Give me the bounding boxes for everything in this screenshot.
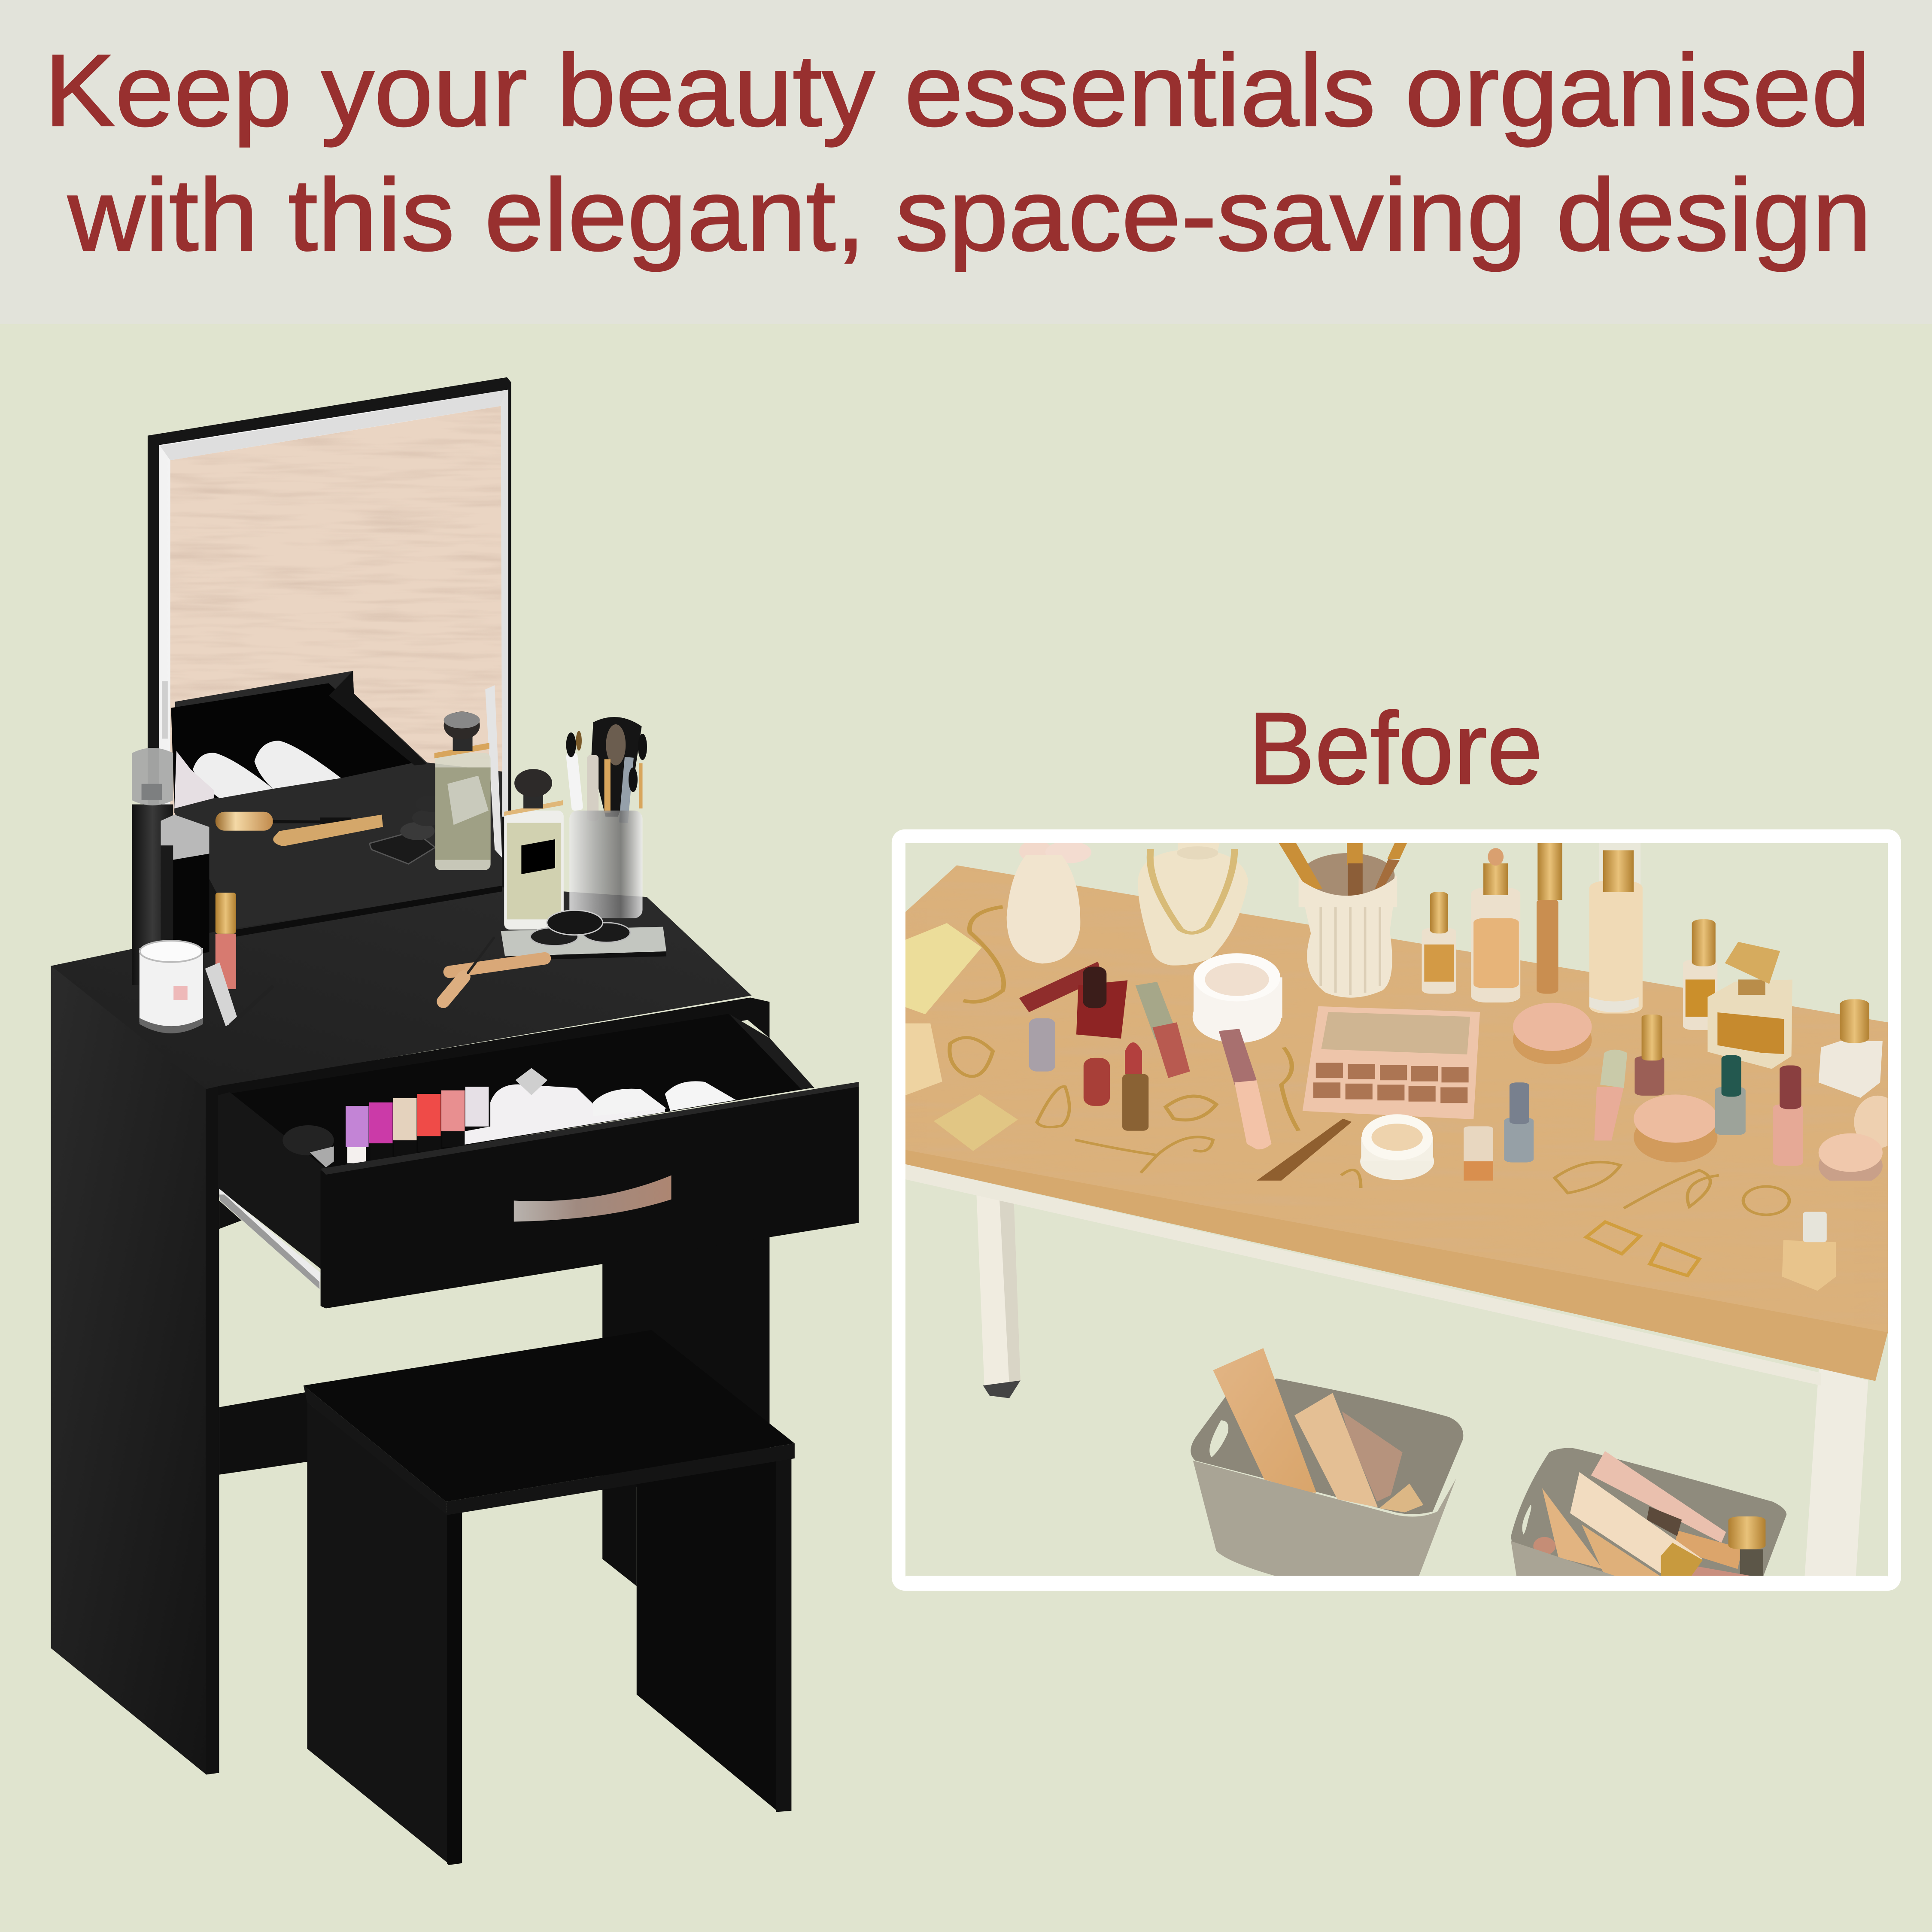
gold eyelash curler bbox=[444, 938, 545, 1002]
clear bottle bbox=[1819, 999, 1883, 1098]
mascara on mirror reflection bbox=[216, 812, 383, 846]
mirror bbox=[148, 377, 511, 981]
black box bottle bbox=[161, 814, 209, 956]
cream jar bbox=[1193, 953, 1282, 1043]
lip gloss bbox=[1594, 1050, 1627, 1141]
pink gloss bbox=[1773, 1066, 1803, 1166]
wooden brush bbox=[1537, 843, 1562, 994]
tall serum bottle bbox=[1471, 848, 1520, 1002]
drawer front bbox=[321, 1084, 859, 1309]
drawer runner bbox=[219, 1188, 321, 1289]
photo frame bbox=[892, 829, 1901, 1591]
lip gloss bbox=[216, 893, 236, 989]
compact lower bbox=[1634, 1094, 1717, 1163]
desk frame and legs bbox=[905, 1164, 1868, 1580]
drawer items bbox=[283, 1068, 736, 1167]
right lower items bbox=[1555, 1162, 1836, 1291]
table base bbox=[51, 966, 859, 1865]
title: Keep your beauty essentials organised bbox=[44, 33, 1871, 148]
large perfume bbox=[1707, 942, 1792, 1069]
brush cup bbox=[1279, 843, 1407, 998]
left items bbox=[905, 907, 1361, 1188]
perfume bottle bbox=[504, 769, 564, 930]
vase with flowers bbox=[1007, 840, 1091, 963]
stool seat bbox=[304, 1330, 795, 1502]
pink jars bbox=[1819, 1096, 1902, 1185]
photo contents: desk and left items bbox=[905, 840, 1888, 1580]
small bottle bbox=[1464, 1126, 1493, 1183]
photo frame bottom edge bbox=[905, 1576, 1888, 1591]
compacts reflected bbox=[369, 796, 447, 864]
brown polish bbox=[1634, 1015, 1664, 1096]
drawer interior bbox=[227, 1014, 812, 1169]
small amber bottle bbox=[1422, 892, 1456, 994]
stool left panel bbox=[307, 1402, 449, 1864]
compact tray bbox=[501, 910, 666, 960]
stool right panel bbox=[637, 1454, 777, 1811]
back right leg bbox=[602, 1209, 769, 1586]
teal polish bbox=[1715, 1055, 1746, 1135]
vanity table with mirror and stool bbox=[51, 377, 859, 1865]
grey polish bbox=[1504, 1082, 1534, 1163]
mirror ledge bbox=[236, 886, 502, 937]
compact upper bbox=[1513, 1003, 1592, 1064]
small jar bbox=[1360, 1114, 1434, 1180]
items on table and by mirror bbox=[132, 711, 666, 1033]
heading: before: Before bbox=[1248, 691, 1543, 805]
eyeshadow palette bbox=[1303, 1006, 1480, 1119]
amber bottle right bbox=[1683, 919, 1717, 1030]
title: with this elegant, space-saving design bbox=[67, 158, 1871, 272]
brush holder bbox=[566, 717, 647, 918]
chain strand bbox=[1281, 1048, 1299, 1131]
mascara tube bbox=[1219, 1029, 1271, 1149]
cross bar bbox=[219, 1391, 310, 1475]
foundation bottle bbox=[1589, 843, 1643, 1014]
necklace bust bbox=[1138, 843, 1248, 966]
black spray bottle bbox=[132, 748, 173, 985]
drawer shadow under rail bbox=[219, 1200, 242, 1229]
left side panel bbox=[51, 966, 207, 1775]
drawer handle bbox=[514, 1175, 671, 1221]
photo contents: centre and right items bbox=[1138, 843, 1902, 1185]
table top surface bbox=[51, 887, 752, 1089]
title bbox=[44, 33, 1871, 272]
storage baskets bbox=[1191, 1348, 1786, 1577]
basket left bbox=[1191, 1348, 1463, 1577]
wooden stick bbox=[1257, 1119, 1352, 1181]
basket right bbox=[1511, 1448, 1786, 1577]
candle bbox=[140, 941, 203, 1033]
drawer side bbox=[218, 1092, 326, 1273]
header band bbox=[0, 0, 1932, 324]
top front rail bbox=[218, 998, 769, 1113]
desk top bbox=[905, 865, 1888, 1381]
panel: before photo bbox=[892, 829, 1902, 1591]
reflected perfume bottle bbox=[434, 711, 491, 870]
clear clip and eyeliner bbox=[205, 963, 273, 1026]
